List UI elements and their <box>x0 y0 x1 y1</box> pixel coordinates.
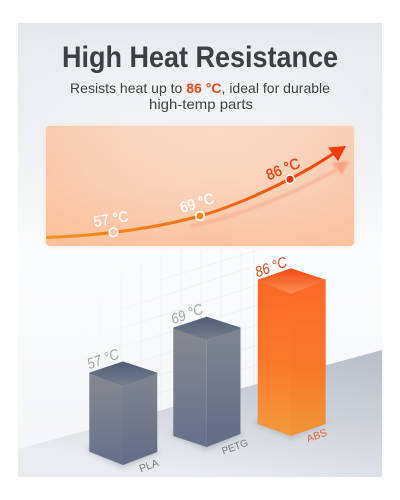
bar: PLA <box>85 346 160 475</box>
curve arrow <box>46 146 346 238</box>
subtitle <box>70 80 330 112</box>
floor <box>18 350 382 477</box>
panel: temperature curve chart <box>46 126 354 246</box>
value label: 86 °C <box>253 254 290 281</box>
wall grid <box>80 250 258 432</box>
point: 57 °C: 57 °C <box>92 208 130 231</box>
name label: PLA <box>138 457 160 475</box>
value label: 69 °C <box>169 301 206 328</box>
subtitle: Resists heat up to 86 °C, ideal for durable <box>70 80 330 96</box>
bar: PETG <box>169 301 250 457</box>
point: 86 °C: 86 °C <box>264 155 303 184</box>
title: High Heat Resistance <box>62 41 338 74</box>
point: 69 °C: 69 °C <box>178 190 217 217</box>
name label: ABS <box>305 427 329 445</box>
value label: 57 °C <box>85 346 122 373</box>
name label: PETG <box>220 438 250 457</box>
bar: ABS <box>252 254 329 445</box>
curve shadow <box>190 161 349 226</box>
subtitle: high-temp parts <box>149 96 253 112</box>
